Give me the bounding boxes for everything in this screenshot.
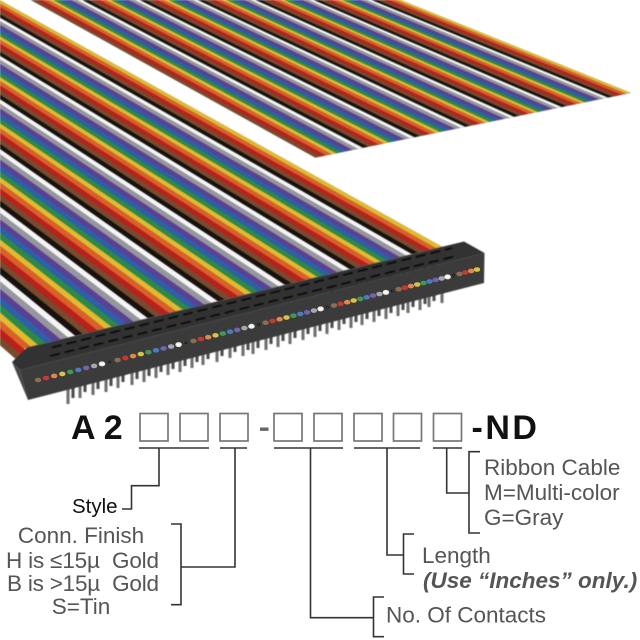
photo: upper ribbon cable [31,0,631,158]
connector finish leader and bracket [171,448,247,605]
dash between boxes [260,428,268,431]
connector finish label: S=Tin [52,594,110,619]
connector finish label: Conn. Finish [18,523,144,548]
part number heading prefix: A 2 [71,409,123,447]
number of contacts leader and bracket [274,448,384,637]
ribbon cable label: G=Gray [484,505,564,530]
length leader and bracket [354,448,420,574]
connector finish label: H is ≤15µ Gold [6,548,159,573]
style leader line [122,448,209,509]
length label [422,543,637,593]
style label: Style [72,495,118,518]
length label: Length [422,543,491,568]
ribbon cable label: M=Multi-color [484,480,620,505]
connector pins [68,262,442,404]
connector slits [50,248,458,356]
part number boxes [140,414,462,441]
ribbon cable leader and bracket [433,448,480,533]
connector finish label [6,523,159,619]
part number suffix: -ND [472,409,539,447]
number of contacts label: No. Of Contacts [386,602,546,628]
length label: (Use “Inches” only.) [423,568,637,593]
ribbon cable label [484,455,620,530]
ribbon cable label: Ribbon Cable [484,455,620,480]
connector finish label: B is >15µ Gold [7,571,159,596]
connector contact holes [36,268,479,381]
photo: lower ribbon cable [0,0,443,361]
connector housing [12,242,484,400]
